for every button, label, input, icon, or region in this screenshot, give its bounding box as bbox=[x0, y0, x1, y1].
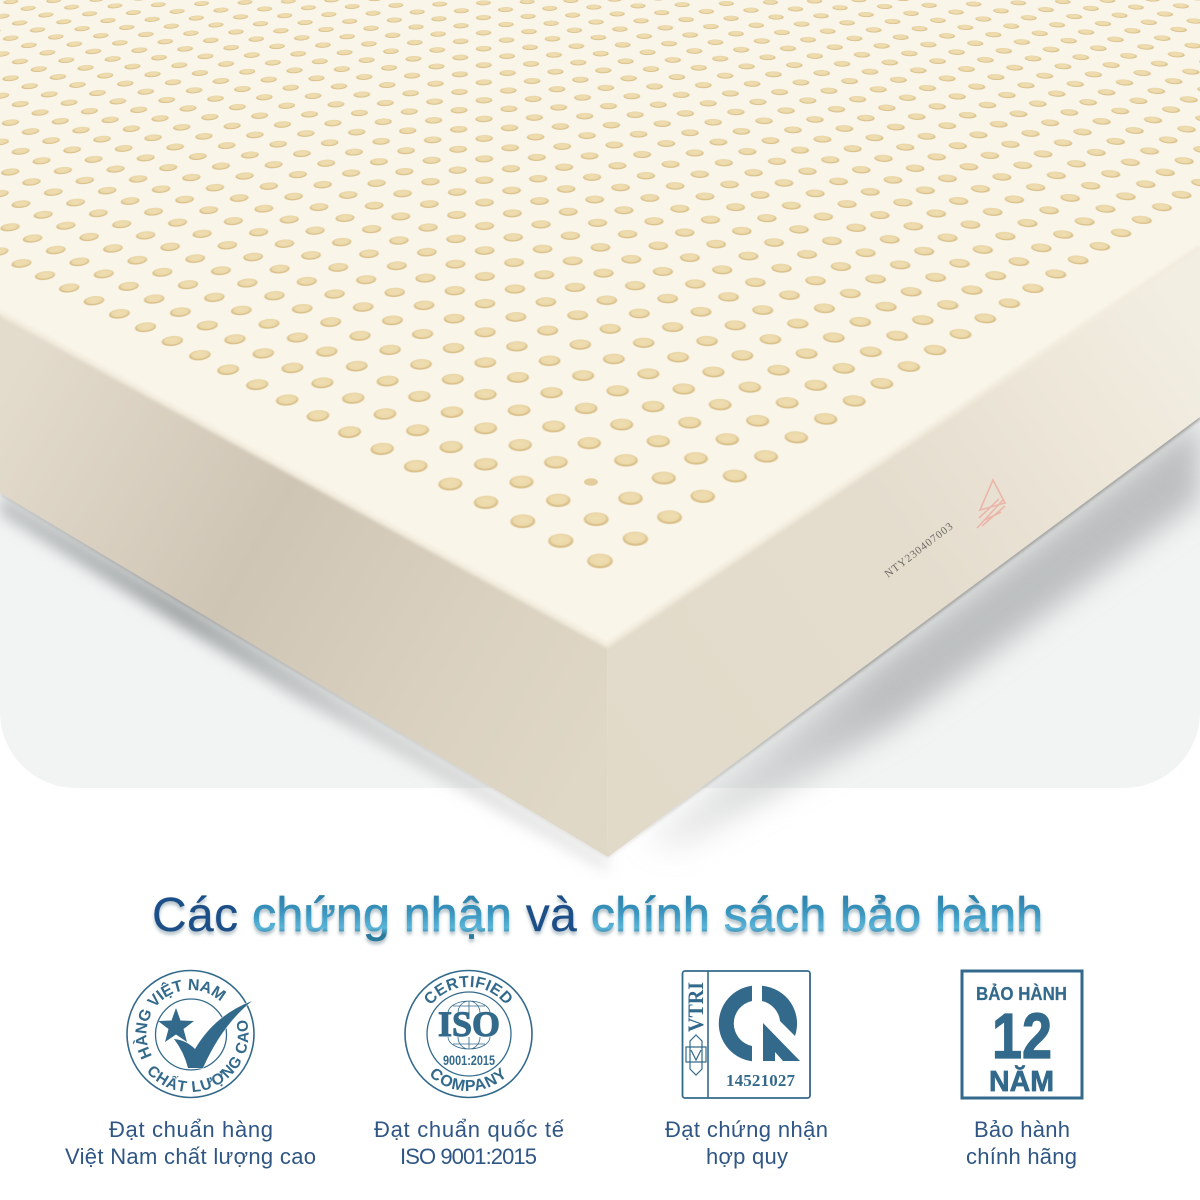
badge: Bảo hành 12 năm: NĂM bbox=[989, 1065, 1054, 1098]
mattress bbox=[0, 0, 1200, 870]
mattress body faces bbox=[0, 0, 1200, 870]
small hole and factory marks: NTY230407003 bbox=[883, 520, 956, 580]
caption 3 bbox=[665, 1117, 828, 1169]
badge: Hàng Việt Nam chất lượng cao bbox=[126, 970, 255, 1098]
caption 1 bbox=[65, 1117, 316, 1169]
badge: Bảo hành 12 năm: BẢO HÀNH bbox=[976, 983, 1067, 1004]
small hole and factory marks bbox=[580, 473, 1006, 580]
badge: Bảo hành 12 năm bbox=[962, 971, 1082, 1098]
caption 4 bbox=[966, 1117, 1077, 1169]
caption 4: chính hãng bbox=[966, 1144, 1077, 1169]
background panel bbox=[0, 0, 1200, 788]
title: Các chứng nhận và chính sách bảo hành bbox=[152, 889, 1043, 942]
badge: ISO 9001:2015 certified company bbox=[404, 970, 533, 1098]
perforation holes bbox=[0, 0, 1200, 569]
badge: ISO 9001:2015 certified company: ISO bbox=[438, 1004, 500, 1044]
certifications row bbox=[65, 970, 1084, 1169]
caption 1: Đạt chuẩn hàng bbox=[109, 1117, 273, 1142]
badge: VTRI CR mark 14521027: 14521027 bbox=[726, 1071, 796, 1090]
badge: Bảo hành 12 năm: 12 bbox=[992, 1000, 1052, 1072]
caption 3: Đạt chứng nhận bbox=[665, 1117, 828, 1142]
badge: Hàng Việt Nam chất lượng cao: CHẤT LƯỢNG CAO bbox=[148, 1020, 249, 1092]
badge: ISO 9001:2015 certified company: COMPANY bbox=[431, 1067, 504, 1092]
caption 4: Bảo hành bbox=[974, 1117, 1070, 1142]
badge: ISO 9001:2015 certified company: 9001:2015 bbox=[443, 1052, 495, 1068]
caption 3: hợp quy bbox=[706, 1144, 788, 1169]
caption 1: Việt Nam chất lượng cao bbox=[65, 1144, 316, 1169]
badge: ISO 9001:2015 certified company: CERTIFIED bbox=[424, 976, 512, 1003]
caption 2 bbox=[374, 1117, 564, 1169]
badge: Hàng Việt Nam chất lượng cao: HÀNG VIỆT NAM bbox=[132, 978, 226, 1060]
caption 2: ISO 9001:2015 bbox=[400, 1144, 537, 1169]
badge: VTRI CR mark 14521027 bbox=[682, 971, 810, 1098]
caption 2: Đạt chuẩn quốc tế bbox=[374, 1117, 564, 1142]
badge: VTRI CR mark 14521027: VTRI bbox=[683, 982, 708, 1032]
